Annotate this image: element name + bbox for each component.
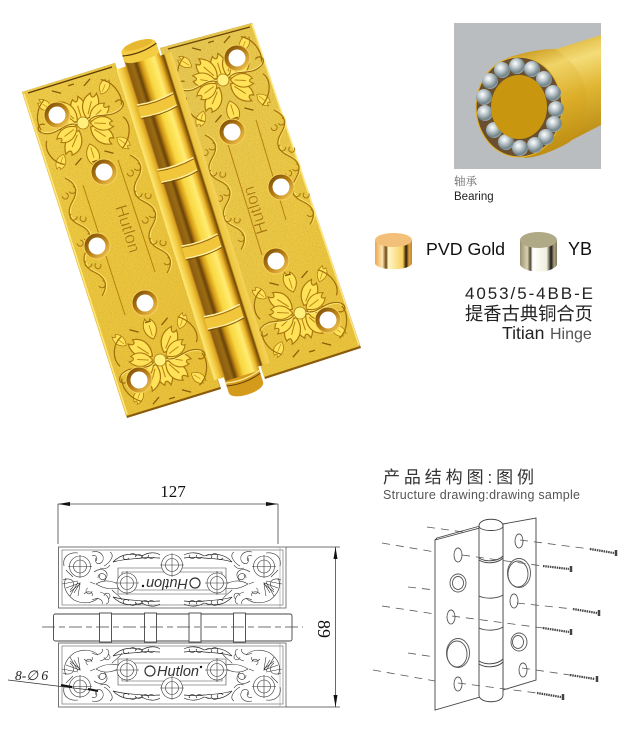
centre line <box>42 626 303 628</box>
right leaf <box>160 23 361 379</box>
product title block: 4053/5-4BB-E <box>465 284 593 303</box>
bearing caption: 轴承 <box>454 174 477 188</box>
left leaf logo text: Hutlon <box>111 202 144 255</box>
structure drawing heading <box>383 468 580 502</box>
left leaf <box>22 63 221 418</box>
finish swatch: PVD Gold <box>375 233 505 269</box>
bearing cavity <box>476 57 562 157</box>
screws <box>537 549 616 700</box>
steel balls <box>476 58 564 156</box>
gold shaft sleeve <box>499 35 601 158</box>
height dimension 89: 89 <box>314 620 334 638</box>
hole callout 8-Ø6: 8-∅ 6 <box>15 668 48 683</box>
left dashed guide lines <box>373 527 478 681</box>
bottom plate <box>58 643 286 707</box>
barrel with knuckles <box>110 32 277 403</box>
product title block: Titian <box>502 323 544 343</box>
hinge barrel <box>479 519 503 702</box>
right dashed guide lines <box>452 540 590 693</box>
bottom plate logo: Hutlon <box>157 664 199 680</box>
bearing caption <box>454 174 494 203</box>
bearing panel <box>454 23 601 169</box>
inner shaft disc <box>491 75 547 139</box>
right leaf logo text: Hutlon <box>239 184 272 237</box>
top plate logo: Hutlon <box>146 575 188 591</box>
width dimension 127 <box>58 482 278 544</box>
barrel <box>54 613 292 642</box>
grey background <box>454 23 601 169</box>
exploded hinge drawing <box>373 518 616 710</box>
product title block <box>465 284 593 343</box>
finish swatch: YB: YB <box>568 239 592 259</box>
bearing caption: Bearing <box>454 191 494 203</box>
technical drawing: dimensioned hinge <box>8 482 340 707</box>
finish swatch: PVD Gold: PVD Gold <box>426 239 505 259</box>
product title block: 提香古典铜合页 <box>465 303 593 324</box>
top plate <box>58 547 286 608</box>
hinge photo: antique gold hinge <box>22 23 361 418</box>
hinge leaves <box>435 518 536 710</box>
finish swatch: YB <box>520 232 592 272</box>
structure drawing heading: 产品结构图:图例 <box>383 468 534 487</box>
structure drawing heading: Structure drawing:drawing sample <box>383 488 580 502</box>
height dimension 89 <box>286 547 340 707</box>
width dimension 127: 127 <box>160 482 186 501</box>
product title block: Hinge <box>550 326 592 343</box>
screw holes <box>446 534 530 691</box>
hole callout 8-Ø6 <box>8 668 98 691</box>
